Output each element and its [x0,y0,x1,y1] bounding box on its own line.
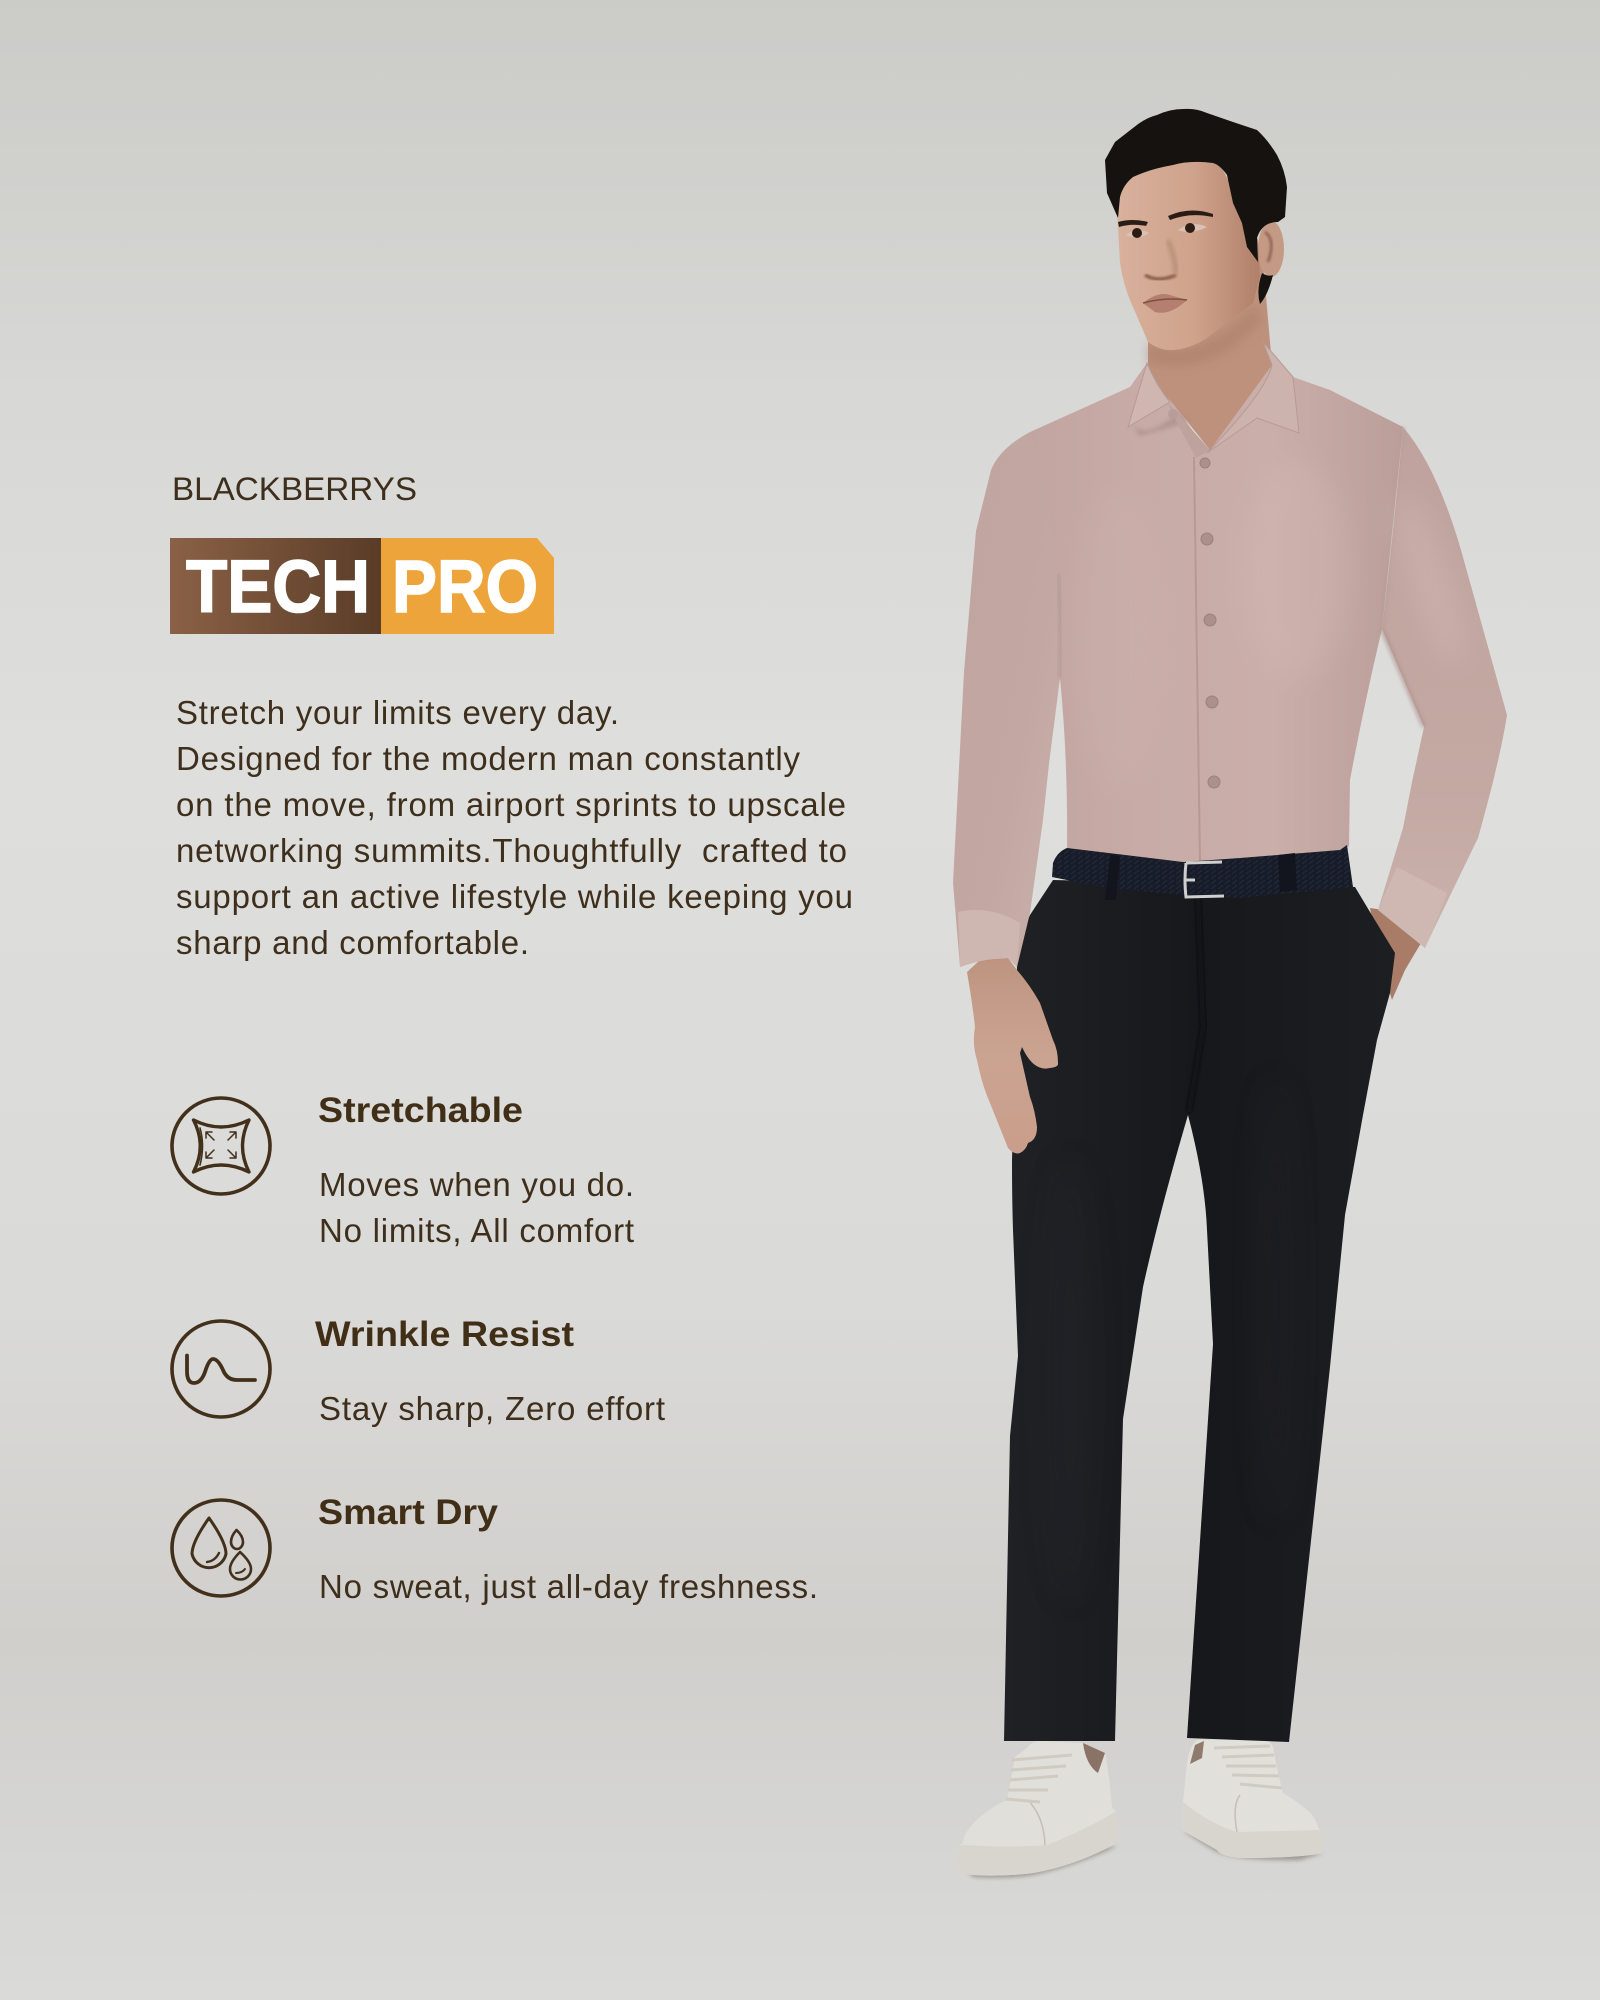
body text: Moves when you do. [319,1166,634,1203]
trousers [1004,880,1395,1742]
hair [1105,109,1287,262]
description text: support an active lifestyle while keeping you [176,878,853,915]
buttons [1200,458,1220,788]
model photograph illustration [953,109,1507,1878]
logo: Tech Pro badge: PRO [392,545,538,628]
feature: Stretchable [172,1091,634,1249]
eyes [1126,223,1207,238]
left hand [967,958,1058,1153]
description text [176,694,853,961]
body text: No sweat, just all-day freshness. [319,1568,818,1605]
brand name: BLACKBERRYS [172,471,417,507]
logo: Tech Pro badge [170,538,554,634]
description text: on the move, from airport sprints to upscale [176,786,846,823]
body text: No limits, All comfort [319,1212,634,1249]
body text: Stay sharp, Zero effort [319,1390,665,1427]
heading: Stretchable [318,1091,523,1130]
head [1105,109,1287,350]
shoes [957,1738,1323,1878]
face [1116,150,1260,350]
belt [1052,845,1353,900]
heading: Wrinkle Resist [315,1315,574,1354]
heading: Smart Dry [318,1493,499,1532]
body text [319,1166,634,1249]
feature: Wrinkle Resist [172,1315,665,1427]
right shoe [1182,1830,1323,1860]
collar [1128,342,1299,458]
left shoe [965,1846,1117,1878]
shirt body and sleeves [953,342,1507,967]
left sleeve [953,432,1060,967]
description text: sharp and comfortable. [176,924,529,961]
description text: networking summits.Thoughtfully crafted to [176,832,847,869]
right wrist in pocket [1370,908,1427,1000]
brows [1118,210,1213,227]
nose [1145,275,1176,279]
description text: Stretch your limits every day. [176,694,619,731]
icon: stretch fabric [172,1098,270,1194]
right sleeve [1378,427,1507,948]
ear [1258,221,1284,277]
feature: Smart Dry [172,1493,818,1605]
lips [1143,294,1187,313]
logo: Tech Pro badge: TECH [186,545,370,628]
icon: water drops [172,1500,270,1596]
icon: wrinkle wave [172,1321,270,1417]
description text: Designed for the modern man constantly [176,740,800,777]
neck [1148,250,1272,450]
